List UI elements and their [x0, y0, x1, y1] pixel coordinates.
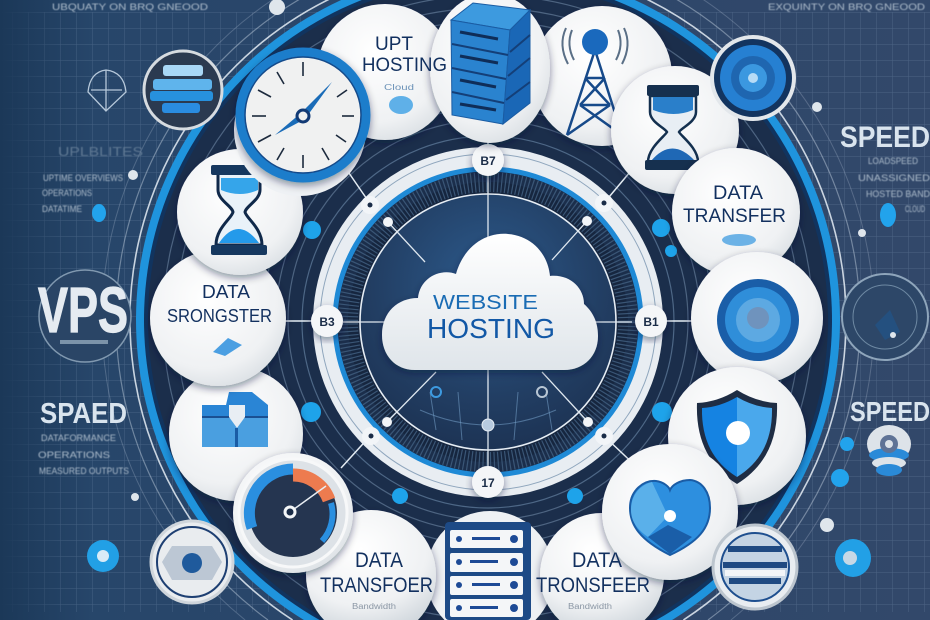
main dark ring with bright blue border: [136, 0, 840, 620]
bubble: hourglass right: [611, 66, 739, 194]
icon: blue heart: [630, 480, 710, 555]
icon: blue dot bottom left: [87, 540, 119, 572]
bubble: server stack top: [430, 0, 550, 143]
icon: small blue chip: [213, 338, 242, 356]
heading: website: WEBSITE: [433, 292, 538, 314]
label: data transfer bottom right: Bandwidth: [568, 602, 612, 611]
bubble: server rack bottom backing: [426, 511, 554, 620]
node: top: [472, 144, 504, 176]
icon: shield: [697, 390, 777, 484]
bubble and icon: clock: [234, 52, 366, 196]
label: upt hosting: UPT: [375, 34, 413, 55]
bubble: data transfer bottom left: DATA: [355, 549, 403, 572]
heading: hosting: HOSTING: [427, 313, 555, 344]
bubble: data transfer bottom left: [306, 510, 436, 620]
left text block: top: UPLBLITES: [58, 144, 143, 159]
icon: outline gem top left: [88, 70, 126, 111]
left text block: bottom: [38, 433, 129, 476]
right text block: LOADSPEED: [868, 156, 918, 166]
icon: top right swirl circle: [712, 37, 794, 119]
icon: bottom left lock circle: [151, 521, 233, 603]
node: right: B1: [643, 315, 659, 329]
bubble: data transfer bottom left: Bandwidth: [352, 602, 396, 611]
icon: top left stacked circle: [144, 51, 222, 129]
left text block: top: DATATIME: [42, 204, 82, 214]
small grey and white pins: [128, 0, 866, 532]
icon: blue box: [202, 392, 268, 447]
node: bottom: 17: [481, 476, 495, 490]
icon: small blue blot: [722, 234, 756, 246]
bubble: data transfer right: TRANSFER: [683, 206, 786, 227]
small blue dots on the dark ring: [301, 219, 677, 504]
left text block: bottom: OPERATIONS: [38, 450, 110, 460]
icon: blue swirl: [717, 279, 799, 361]
node: right: [635, 305, 667, 337]
icon: server stack: [451, 3, 530, 124]
bubble: data storage: SRONGSTER: [167, 306, 272, 326]
top left caption: UBQUATY ON BRQ GNEOOD: [52, 2, 209, 12]
bubble: right swirl icon: [691, 252, 823, 384]
left text block: top: UPTIME OVERVIEWS: [43, 173, 123, 183]
bubble: upt hosting: [317, 4, 453, 140]
left text block: top: OPERATIONS: [42, 188, 92, 198]
node: top: B7: [480, 154, 496, 168]
icon: bottom right striped circle: [713, 525, 797, 609]
small ring pins: [361, 194, 613, 445]
icon: blue dot bottom right: [835, 539, 871, 577]
scattered blue dots and pins: [92, 203, 896, 487]
bubble: hourglass left: [177, 149, 303, 275]
central hub rings: [302, 136, 674, 508]
hub connector nodes: [311, 144, 667, 498]
left text block: top: [42, 144, 143, 214]
VPS badge: [38, 270, 131, 362]
bubble: box icon: [169, 367, 303, 501]
node: left: B3: [319, 315, 335, 329]
VPS badge: VPS: [38, 274, 128, 346]
network globe badge right: [842, 274, 928, 360]
node: left: [311, 305, 343, 337]
bubble and icon: gauge: [233, 453, 353, 573]
icon: hourglass: [211, 165, 267, 255]
label: upt hosting: HOSTING: [362, 55, 447, 76]
cloud: website hosting: [382, 234, 598, 370]
node: bottom: [472, 466, 504, 498]
bubble: data transfer right: DATA: [713, 183, 763, 204]
icon: hourglass: [645, 85, 701, 170]
icon: radio tower: [562, 28, 628, 135]
bubble: tower: [532, 6, 672, 146]
bubble: data transfer right: [672, 148, 800, 276]
left heading: speed: SPAED: [40, 398, 127, 430]
right text block: HOSTED BAND: [866, 189, 930, 199]
icon: server rack bottom: [445, 522, 531, 620]
left text block: bottom: MEASURED OUTPUTS: [39, 466, 129, 476]
label: upt hosting: Cloud: [384, 83, 414, 92]
right text block: UNASSIGNED: [858, 173, 930, 183]
label: data transfer bottom right: [536, 549, 650, 611]
label: upt hosting: [362, 34, 447, 114]
left text block: bottom: DATAFORMANCE: [41, 433, 116, 443]
bubble: data transfer bottom left: TRANSFOER: [320, 574, 433, 597]
bubble: data storage: DATA: [202, 282, 250, 302]
bubble: data storage: [150, 250, 286, 386]
bubble: shield: [668, 367, 806, 505]
spokes to bubbles: [270, 130, 695, 470]
top right caption: EXQUINTY ON BRQ GNEOOD: [768, 2, 926, 12]
icon: stacked coil right: [867, 425, 911, 476]
bubble: data transfer bottom right: [540, 513, 664, 620]
bubble: heart: [602, 444, 738, 580]
right text block: [858, 156, 930, 214]
label: data transfer bottom right: TRONSFEER: [536, 574, 650, 597]
label: data transfer bottom right: DATA: [572, 549, 622, 572]
